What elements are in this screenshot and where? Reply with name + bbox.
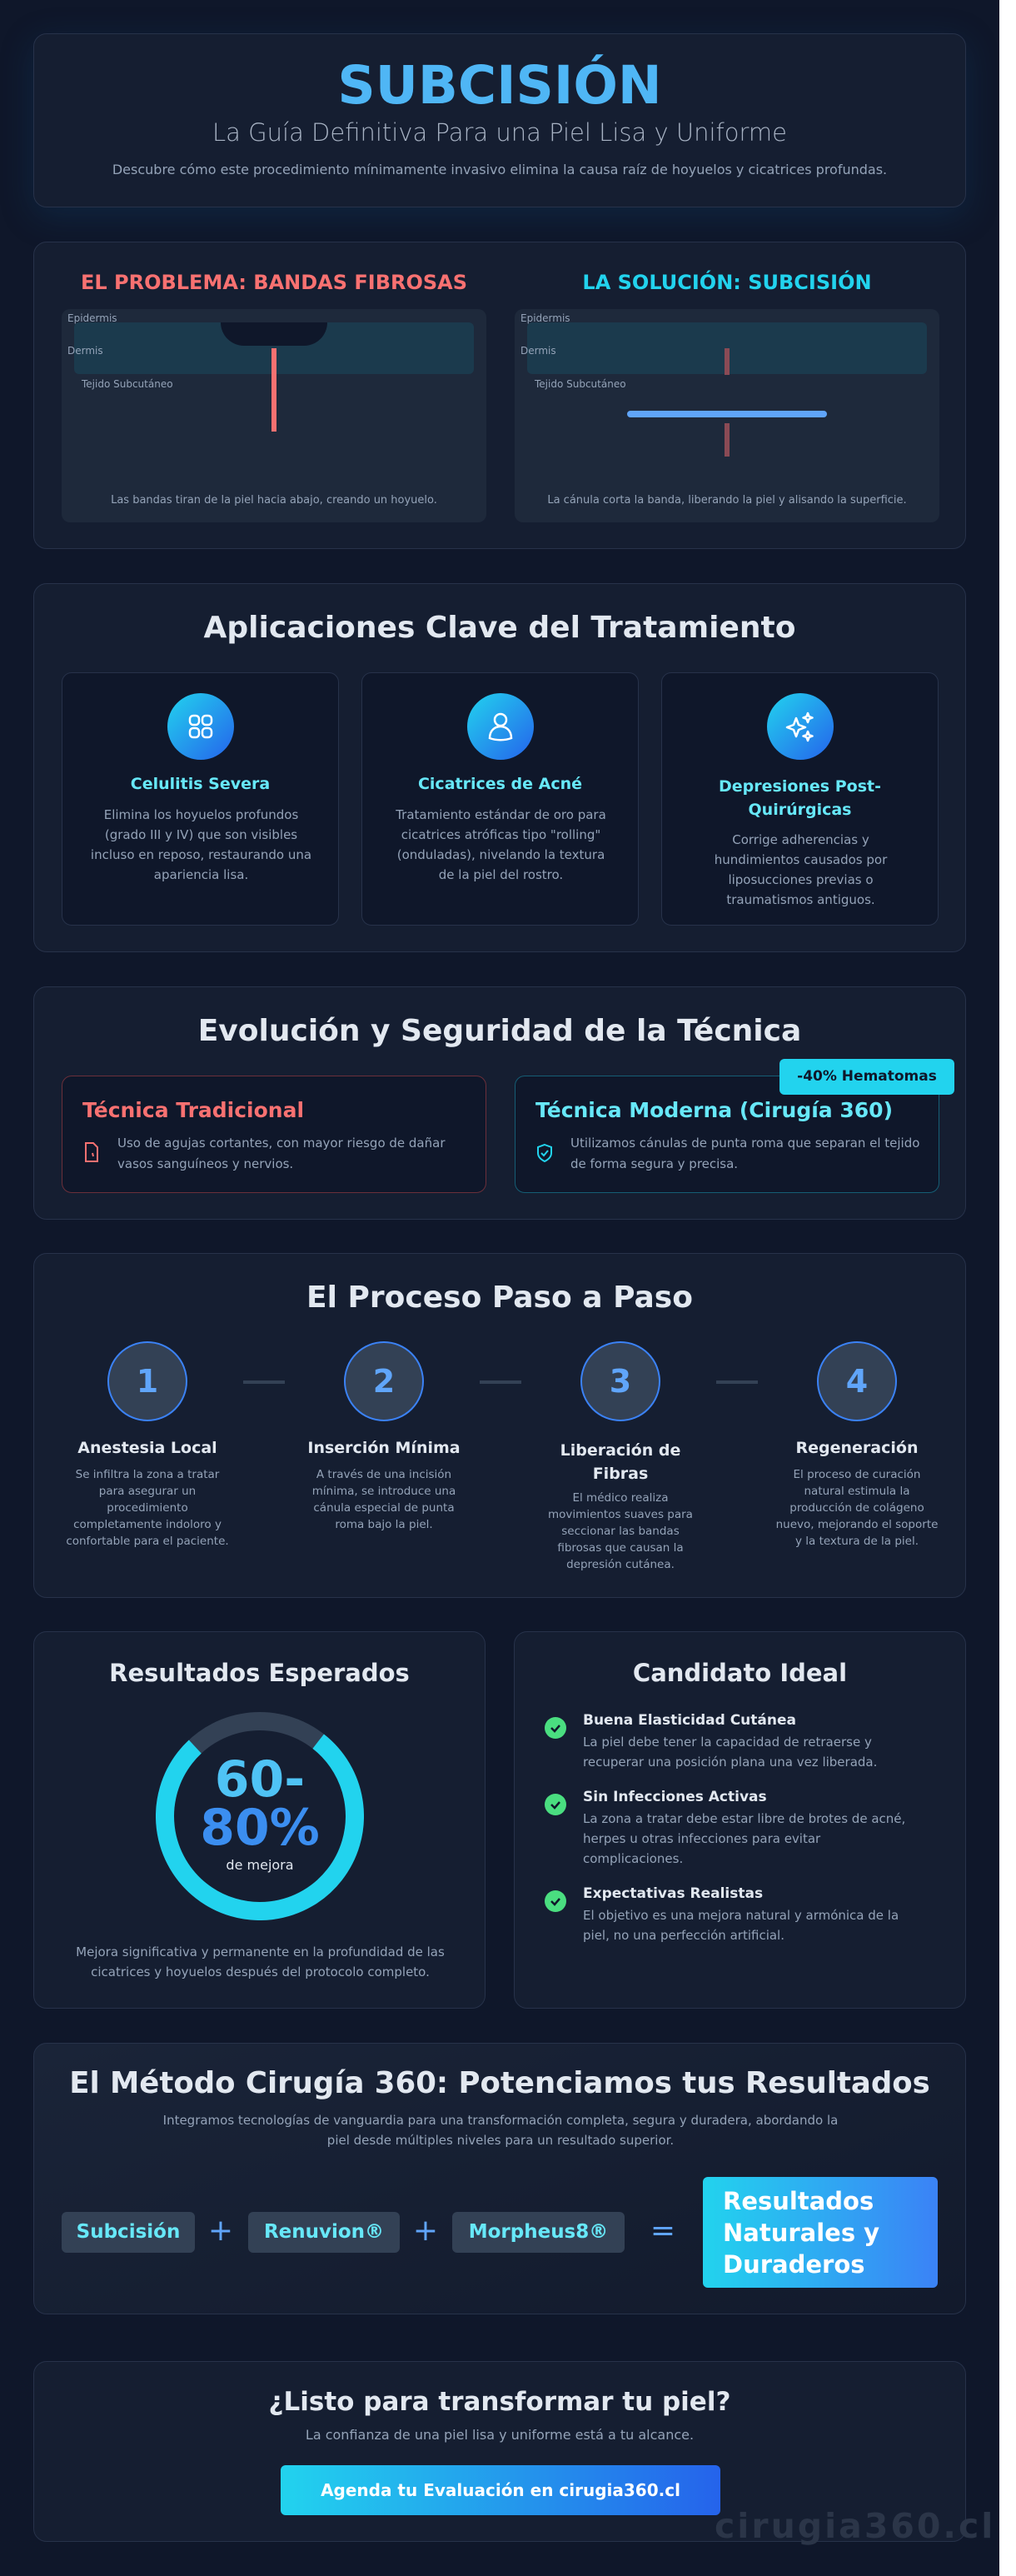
caption: La cánula corta la banda, liberando la piel y alisando la superficie. (547, 494, 907, 507)
step 4 (776, 1341, 938, 1548)
card: acne (361, 672, 639, 926)
step 4: Regeneración (796, 1439, 918, 1457)
ring chart: 60- (215, 1750, 305, 1809)
equation: Morpheus8® (469, 2221, 608, 2243)
subtext: La confianza de una piel lisa y uniforme está a tu alcance. (306, 2427, 694, 2443)
card: modern: Técnica Moderna (Cirugía 360) (535, 1098, 893, 1122)
button: Agenda tu Evaluación en cirugia360.cl (321, 2480, 680, 2500)
fibrous band (271, 348, 276, 432)
card: depresiones: Depresiones Post- (719, 777, 881, 796)
diagram: solution: Dermis (520, 345, 556, 357)
diagram: problem: Tejido Subcutáneo (82, 378, 173, 390)
item 1: La piel debe tener la capacidad de retraerse y recuperar una posición plana una vez liberada. (583, 1735, 877, 1770)
ring chart: de mejora (226, 1857, 294, 1873)
item 1 (545, 1712, 877, 1770)
item 1: Buena Elasticidad Cutánea (583, 1712, 796, 1729)
panel: evolution (33, 986, 966, 1220)
card: acne: Tratamiento estándar de oro para cicatrices atróficas tipo "rolling" (onduladas), nivelando la textura de la piel del rostro. (396, 807, 606, 882)
panel: problem vs solution (33, 242, 966, 549)
equation: + (208, 2214, 233, 2248)
step 2: Inserción Mínima (307, 1439, 461, 1457)
item 2: Sin Infecciones Activas (583, 1789, 767, 1805)
description (163, 2113, 838, 2148)
heading: El Proceso Paso a Paso (306, 1281, 693, 1315)
heading: Aplicaciones Clave del Tratamiento (204, 611, 795, 645)
ring chart (156, 1712, 364, 1920)
item 3: El objetivo es una mejora natural y armónica de la piel, no una perfección artificial. (583, 1908, 899, 1943)
item 2 (545, 1789, 905, 1866)
card: depresiones: Quirúrgicas (749, 801, 851, 819)
panel: call to action (33, 2361, 966, 2542)
diagram: solution: Epidermis (520, 312, 570, 324)
item 2: La zona a tratar debe estar libre de brotes de acné, (583, 1811, 905, 1826)
card: celulitis: Celulitis Severa (131, 775, 270, 793)
icon: file (85, 1142, 98, 1162)
panel: method (33, 2043, 966, 2314)
step 3: Liberación de Fibras (560, 1441, 680, 1483)
card: celulitis: Elimina los hoyuelos profundos (grado III y IV) que son visibles incluso en reposo, restaurando una apariencia lisa. (91, 807, 311, 882)
diagram: solution (515, 309, 939, 522)
cannula (627, 411, 827, 417)
item 3: Expectativas Realistas (583, 1885, 763, 1902)
heading: Evolución y Seguridad de la Técnica (198, 1014, 801, 1048)
step 2: 2 (373, 1363, 395, 1400)
step 1: Se infiltra la zona a tratar para asegurar un procedimiento completamente indoloro y confortable para el paciente. (66, 1468, 229, 1548)
panel: results (33, 1631, 486, 2009)
diagram: problem: Dermis (67, 345, 103, 357)
icon: sparkles (767, 693, 834, 760)
equation: Subcisión (77, 2221, 180, 2243)
result box: Resultados Naturales y Duraderos (723, 2187, 879, 2279)
heading: solution: LA SOLUCIÓN: SUBCISIÓN (582, 271, 872, 294)
card: depresiones (661, 672, 939, 926)
panel: steps (33, 1253, 966, 1598)
button (281, 2465, 720, 2515)
step 1: 1 (137, 1363, 158, 1400)
icon: shield (537, 1143, 552, 1163)
item 3 (545, 1885, 899, 1943)
icon: grid (167, 693, 234, 760)
step 2 (307, 1341, 461, 1531)
step 1 (66, 1341, 229, 1548)
step 2: A través de una incisión mínima, se introduce una cánula especial de punta roma bajo la piel. (312, 1468, 456, 1531)
step 3 (548, 1341, 693, 1571)
step 3: 3 (610, 1363, 631, 1400)
equation: Renuvion® (264, 2221, 384, 2243)
heading: El Método Cirugía 360: Potenciamos tus Resultados (69, 2066, 930, 2100)
card: celulitis (62, 672, 339, 926)
heading: problem: EL PROBLEMA: BANDAS FIBROSAS (81, 271, 467, 294)
panel: applications (33, 583, 966, 952)
step 1: Anestesia Local (77, 1439, 217, 1457)
item 2: herpes u otras infecciones para evitar (583, 1831, 820, 1846)
card: acne: Cicatrices de Acné (418, 775, 582, 793)
heading: Resultados Esperados (109, 1659, 410, 1687)
card: depresiones: Corrige adherencias y hundimientos causados por liposucciones previas o traumatismos antiguos. (715, 832, 887, 907)
equation: + (413, 2214, 438, 2248)
card: traditional: Técnica Tradicional (82, 1098, 304, 1122)
badge (779, 1059, 954, 1095)
connectors (243, 1380, 285, 1384)
heading: ¿Listo para transformar tu piel? (269, 2387, 730, 2417)
badge: -40% Hematomas (797, 1068, 937, 1085)
step 4: 4 (846, 1363, 868, 1400)
dimple (221, 322, 327, 346)
description: Descubre cómo este procedimiento mínimamente invasivo elimina la causa raíz de hoyuelos y cicatrices profundas. (112, 162, 887, 177)
caption: Mejora significativa y permanente en la profundidad de las cicatrices y hoyuelos después del protocolo completo. (76, 1944, 445, 1979)
step 3: El médico realiza movimientos suaves para seccionar las bandas fibrosas que causan la depresión cutánea. (548, 1491, 693, 1571)
heading: Candidato Ideal (633, 1659, 847, 1687)
result box (703, 2177, 938, 2288)
icon: person (467, 693, 534, 760)
diagram: solution: Tejido Subcutáneo (535, 378, 626, 390)
panel: candidate (514, 1631, 966, 2009)
card: modern: Utilizamos cánulas de punta roma que separan el tejido de forma segura y precisa. (570, 1136, 919, 1171)
card: traditional (62, 1076, 486, 1193)
description: Integramos tecnologías de vanguardia para una transformación completa, segura y duradera, abordando la (163, 2113, 838, 2128)
diagram: problem: Epidermis (67, 312, 117, 324)
watermark: cirugia360.cl (715, 2506, 995, 2546)
card: traditional: Uso de agujas cortantes, con mayor riesgo de dañar vasos sanguíneos y nervios. (117, 1136, 445, 1171)
header card (33, 33, 966, 207)
diagram: problem (62, 309, 486, 522)
title: SUBCISIÓN (337, 55, 662, 116)
item 2: complicaciones. (583, 1851, 683, 1866)
equation (62, 2177, 938, 2288)
ring chart: 80% (200, 1799, 320, 1857)
subtitle: La Guía Definitiva Para una Piel Lisa y Uniforme (212, 118, 787, 147)
caption: Las bandas tiran de la piel hacia abajo, creando un hoyuelo. (111, 494, 437, 507)
equation: = (650, 2214, 675, 2248)
card: modern (515, 1076, 939, 1193)
step 4: El proceso de curación natural estimula la producción de colágeno nuevo, mejorando el soporte y la textura de la piel. (776, 1468, 938, 1548)
description: piel desde múltiples niveles para un resultado superior. (327, 2133, 674, 2148)
